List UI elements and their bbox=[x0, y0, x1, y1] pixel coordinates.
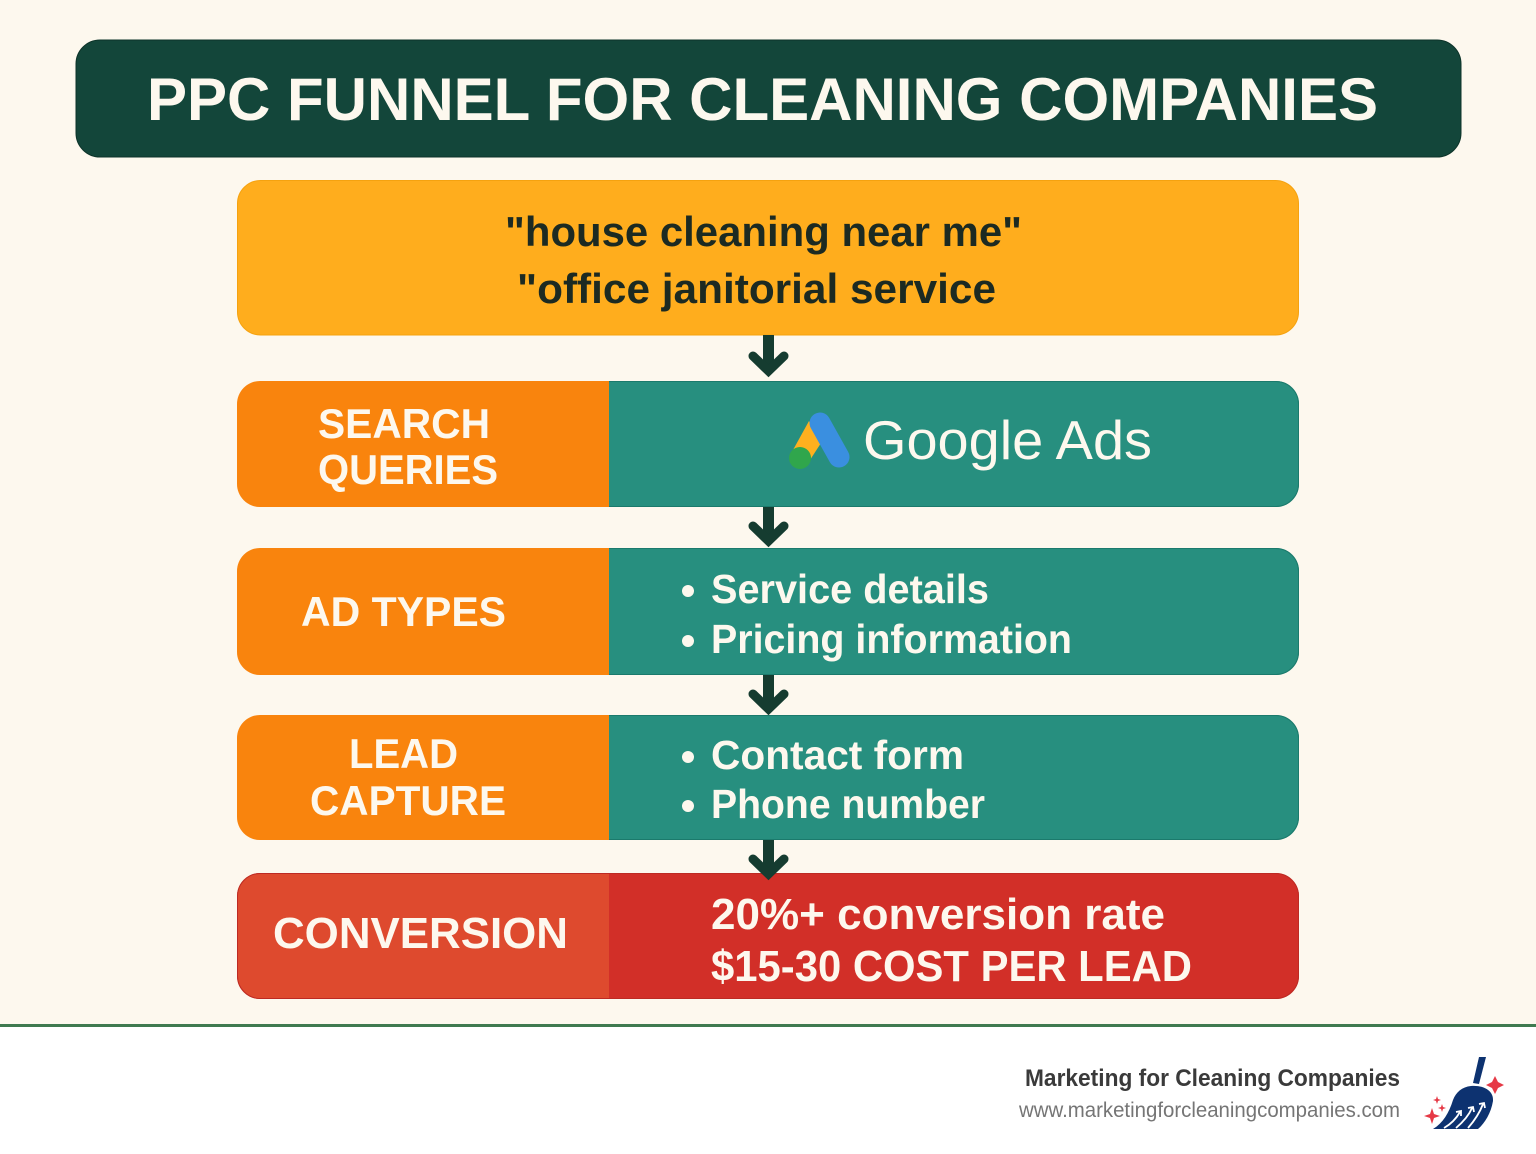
panel: lead capture row: Contact form bbox=[711, 732, 964, 778]
text: google ads wordmark: Google Ads bbox=[863, 409, 1152, 471]
title banner bbox=[76, 40, 1461, 157]
panel: ad types row: Pricing information bbox=[711, 616, 1072, 662]
panel: search query examples: "house cleaning near me" bbox=[505, 208, 1022, 255]
icon: google ads logo bbox=[789, 421, 839, 469]
title banner: PPC FUNNEL FOR CLEANING COMPANIES bbox=[147, 66, 1378, 133]
panel: conversion row bbox=[237, 873, 1299, 999]
arrow: queries to search row bbox=[753, 335, 784, 371]
panel: search query examples bbox=[238, 180, 1298, 335]
panel: conversion row: $15-30 COST PER LEAD bbox=[711, 942, 1192, 991]
panel: lead capture row: CAPTURE bbox=[310, 777, 506, 824]
icon: broom with sparkles bbox=[1424, 1057, 1504, 1129]
panel: lead capture row: Phone number bbox=[711, 781, 985, 827]
panel: ad types row: AD TYPES bbox=[301, 588, 506, 635]
arrow: lead capture to conversion bbox=[753, 840, 784, 874]
panel: ad types row bbox=[237, 548, 1299, 675]
panel: search query examples: "office janitorial service bbox=[517, 265, 996, 312]
arrow: ad types to lead capture bbox=[753, 675, 784, 709]
footer band bbox=[0, 1024, 1536, 1154]
text: footer company name: Marketing for Cleaning Companies bbox=[1025, 1065, 1400, 1092]
panel: conversion row: CONVERSION bbox=[273, 909, 568, 958]
panel: search queries row: SEARCH bbox=[318, 400, 490, 447]
panel: search queries row: QUERIES bbox=[318, 446, 498, 493]
panel: lead capture row bbox=[237, 715, 1299, 840]
panel: lead capture row: LEAD bbox=[349, 730, 458, 777]
panel: ad types row: Service details bbox=[711, 566, 989, 612]
text: footer url: www.marketingforcleaningcompanies.com bbox=[1018, 1099, 1400, 1122]
panel: conversion row: 20%+ conversion rate bbox=[711, 890, 1165, 939]
arrow: search row to ad types bbox=[753, 507, 784, 541]
panel: search queries row bbox=[237, 381, 1299, 507]
